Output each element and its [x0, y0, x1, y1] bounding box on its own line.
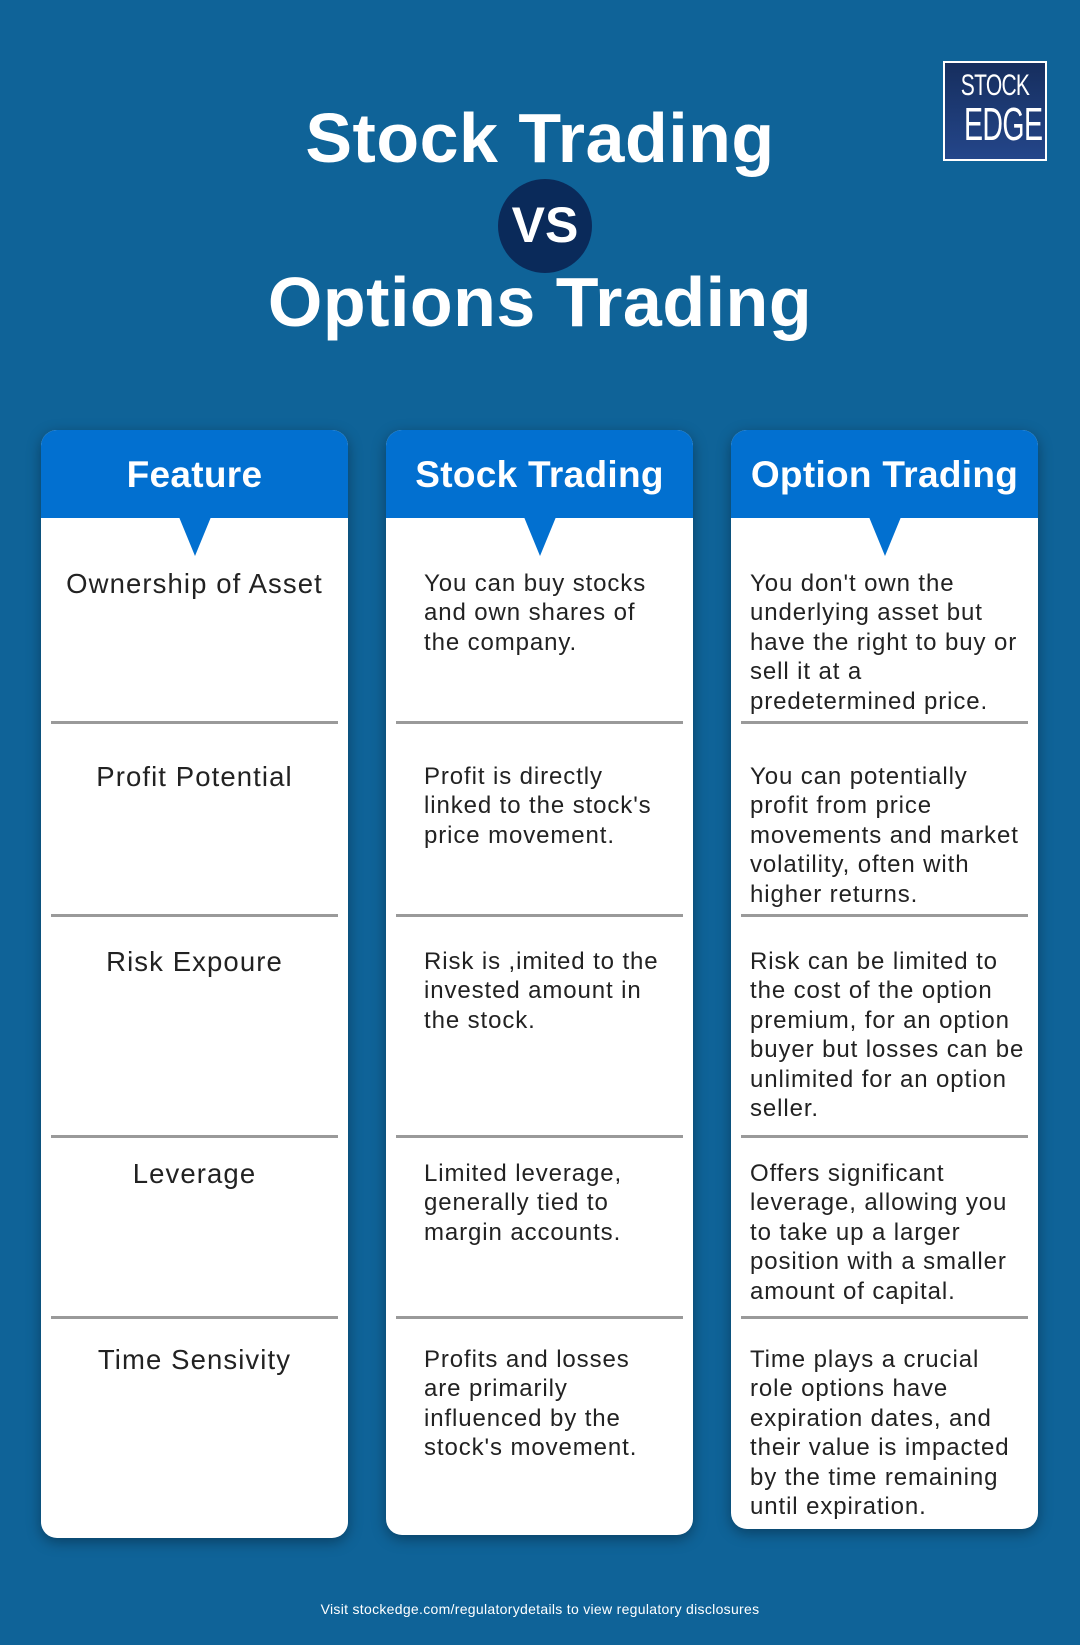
logo: Stock Edge: STOCK: [961, 69, 1029, 102]
text: ownership: and own shares of: [424, 599, 635, 626]
text: leverage: amount of capital.: [750, 1278, 956, 1305]
header: Stock Trading: Stock Trading: [415, 454, 664, 495]
panel: Option Trading column: [731, 430, 1038, 1529]
text: ownership: You can buy stocks: [424, 570, 646, 597]
feature: Leverage: Leverage: [133, 1158, 256, 1189]
logo: Stock Edge: EDGE: [964, 98, 1042, 150]
text: time: Time plays a crucial: [750, 1346, 979, 1373]
text: time: their value is impacted: [750, 1434, 1009, 1461]
text: profit: volatility, often with: [750, 851, 969, 878]
logo: Stock Edge: [943, 61, 1047, 161]
text: risk: seller.: [750, 1095, 819, 1122]
text: profit: [750, 763, 1019, 908]
text: ownership: the company.: [424, 629, 577, 656]
text: risk: the stock.: [424, 1007, 536, 1034]
text: risk: [750, 948, 1024, 1122]
panel: Stock Trading column: [386, 430, 693, 1535]
text: time: Profits and losses: [424, 1346, 630, 1373]
panel: Feature column: [41, 430, 348, 1538]
text: ownership: [750, 570, 1017, 715]
text: leverage: margin accounts.: [424, 1219, 621, 1246]
feature: Ownership of Asset: Ownership of Asset: [66, 568, 323, 599]
text: ownership: You don't own the: [750, 570, 954, 597]
text: profit: You can potentially: [750, 763, 968, 790]
title: Stock Trading: Stock Trading: [305, 99, 775, 177]
feature: Risk Expoure: Risk Expoure: [106, 946, 283, 977]
text: time: [750, 1346, 1009, 1520]
text: ownership: sell it at a: [750, 658, 862, 685]
feature: Time Sensivity: Time Sensivity: [98, 1344, 291, 1375]
text: profit: [424, 763, 652, 849]
text: leverage: Offers significant: [750, 1160, 945, 1187]
text: time: [424, 1346, 637, 1461]
text: profit: movements and market: [750, 822, 1019, 849]
title: Options Trading: Options Trading: [268, 263, 812, 341]
text: risk: invested amount in: [424, 977, 642, 1004]
text: risk: [424, 948, 659, 1034]
text: leverage: to take up a larger: [750, 1219, 961, 1246]
text: risk: Risk can be limited to: [750, 948, 998, 975]
text: risk: the cost of the option: [750, 977, 993, 1004]
text: leverage: [750, 1160, 1007, 1305]
text: ownership: have the right to buy or: [750, 629, 1017, 656]
text: profit: Profit is directly: [424, 763, 603, 790]
text: ownership: predetermined price.: [750, 688, 988, 715]
text: leverage: position with a smaller: [750, 1248, 1007, 1275]
text: time: by the time remaining: [750, 1464, 998, 1491]
text: risk: buyer but losses can be: [750, 1036, 1024, 1063]
text: time: stock's movement.: [424, 1434, 637, 1461]
text: leverage: generally tied to: [424, 1189, 609, 1216]
footer disclosure: Visit stockedge.com/regulatorydetails to view regulatory disclosures: [321, 1601, 759, 1617]
header: Option Trading: Option Trading: [751, 454, 1018, 495]
text: leverage: Limited leverage,: [424, 1160, 622, 1187]
text: time: role options have: [750, 1375, 948, 1402]
text: profit: price movement.: [424, 822, 615, 849]
text: profit: higher returns.: [750, 881, 918, 908]
text: risk: premium, for an option: [750, 1007, 1010, 1034]
text: profit: profit from price: [750, 792, 932, 819]
vs circle: [498, 179, 592, 273]
text: time: expiration dates, and: [750, 1405, 992, 1432]
text: ownership: [424, 570, 646, 656]
text: time: influenced by the: [424, 1405, 621, 1432]
header: Feature: [41, 430, 348, 518]
text: risk: Risk is ,imited to the: [424, 948, 659, 975]
vs circle: VS: [512, 197, 578, 253]
text: leverage: leverage, allowing you: [750, 1189, 1007, 1216]
text: time: until expiration.: [750, 1493, 927, 1520]
text: profit: linked to the stock's: [424, 792, 652, 819]
header: Feature: Feature: [127, 454, 262, 495]
feature: Profit Potential: Profit Potential: [96, 761, 293, 792]
text: leverage: [424, 1160, 622, 1246]
text: time: are primarily: [424, 1375, 568, 1402]
text: ownership: underlying asset but: [750, 599, 983, 626]
text: risk: unlimited for an option: [750, 1066, 1007, 1093]
header: Stock Trading: [386, 430, 693, 518]
header: Option Trading: [731, 430, 1038, 518]
